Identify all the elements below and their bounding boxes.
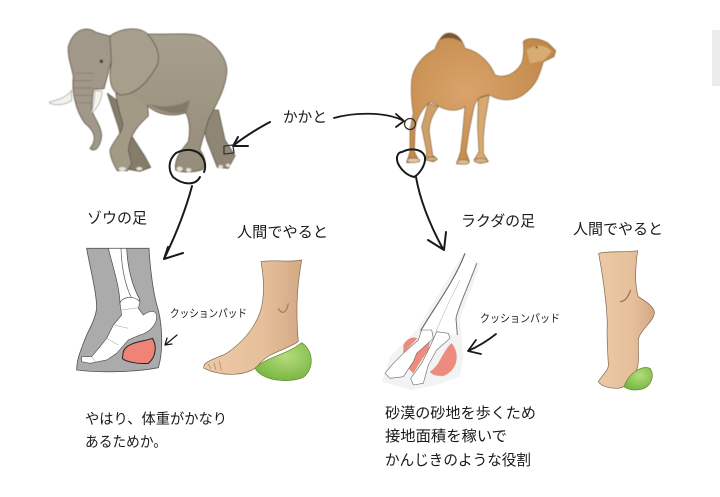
far front leg: [107, 93, 151, 171]
toe bones: [385, 330, 450, 385]
cushion pads: [403, 337, 417, 353]
text: camel note: [385, 405, 536, 469]
cushion pad: [122, 338, 155, 364]
heel box: [224, 145, 234, 154]
diagram: elephant foot skeleton: [77, 248, 162, 372]
circle: elephant foot: [170, 150, 205, 183]
illustration: elephant: [49, 29, 235, 172]
text: elephant note: やはり、体重がかなり: [85, 411, 227, 428]
tusks: [49, 90, 72, 105]
illustration: camel: [407, 33, 556, 164]
foot: [598, 251, 654, 388]
toenails: [119, 164, 230, 172]
head highlight: [527, 46, 552, 63]
arrow: かかと to elephant heel: [233, 122, 270, 146]
circle: camel foot: [397, 149, 425, 177]
text: elephant note: [85, 411, 227, 451]
body and near hind leg: [130, 33, 227, 172]
near front leg: [110, 77, 148, 171]
label: cushion pad left: クッションパッド: [170, 307, 247, 320]
hump: [439, 33, 463, 43]
green ball: [255, 343, 311, 381]
text: camel note: 接地面積を稼いで: [385, 428, 507, 445]
green ball: [624, 368, 652, 390]
arrow: to left cushion pad: [165, 335, 177, 345]
far hind leg: [200, 110, 235, 168]
illustration: human foot on green ball: [204, 260, 311, 381]
diagram: camel foot skeleton: [382, 253, 480, 390]
label: human try left: 人間でやると: [237, 224, 328, 241]
arrow: to camel foot: [416, 177, 446, 250]
foot silhouette: [77, 248, 162, 372]
arrow: to elephant foot: [164, 186, 192, 259]
head and trunk: [68, 29, 112, 150]
pale halo: [382, 253, 480, 390]
feet: [407, 158, 420, 163]
label: elephant foot: ゾウの足: [87, 210, 147, 227]
shaft bones: [422, 253, 477, 335]
arrow: to right cushion pad: [468, 334, 496, 354]
label: cushion pad right: クッションパッド: [480, 312, 560, 325]
illustration: human foot on tiptoe with green ball: [598, 251, 654, 390]
hand-drawn marks: heel circles and arrows: [164, 114, 446, 259]
body: [407, 33, 556, 164]
text: elephant note: あるためか。: [85, 434, 167, 451]
foot bones: [82, 297, 157, 363]
trunk folds: [73, 73, 93, 103]
label: camel foot: ラクダの足: [461, 213, 535, 230]
belly shadow: [148, 100, 190, 113]
eye: [100, 60, 103, 63]
arrow: かかと to camel heel: [334, 114, 404, 127]
label: human try right: 人間でやると: [573, 221, 663, 238]
text: camel note: かんじきのような役割: [385, 452, 531, 469]
grey tab at right edge: [712, 30, 720, 86]
text: camel note: 砂漠の砂地を歩くため: [385, 405, 536, 422]
foot: [204, 260, 302, 374]
far legs: [422, 103, 438, 162]
label: heel: かかと: [283, 109, 327, 126]
ear: [110, 29, 158, 95]
tibia white strip: [108, 248, 140, 304]
